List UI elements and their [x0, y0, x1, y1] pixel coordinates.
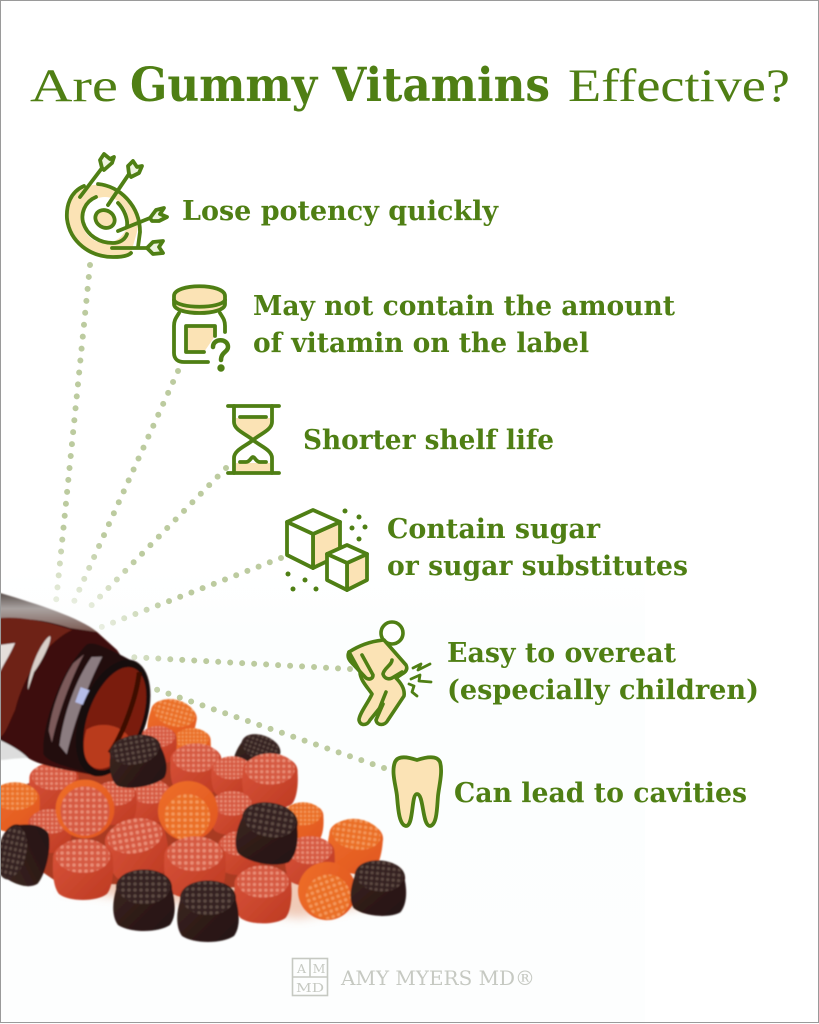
gummy in bottle mouth — [105, 730, 170, 792]
icon: target with arrows — [67, 154, 167, 257]
item 3: shelf life — [228, 406, 554, 473]
logo mark: M — [313, 961, 326, 976]
icon: person with stomach ache — [348, 622, 431, 724]
label: of vitamin on the label — [253, 328, 589, 359]
label: or sugar substitutes — [387, 551, 688, 582]
title: Gummy Vitamins — [130, 58, 550, 113]
label: May not contain the amount — [253, 291, 676, 322]
logo — [292, 958, 535, 996]
icon: tooth — [393, 757, 441, 826]
ground shadow — [60, 860, 400, 918]
icon: jar with question mark — [174, 286, 228, 370]
title: Effective? — [568, 60, 790, 112]
label: Shorter shelf life — [303, 425, 554, 456]
item 4: sugar — [286, 508, 688, 592]
item 5: overeat — [348, 622, 759, 724]
label: (especially children) — [447, 675, 759, 706]
item 6: cavities — [393, 757, 747, 826]
item 1: lose potency — [67, 154, 499, 257]
label: Easy to overeat — [447, 638, 677, 669]
bottle — [0, 593, 170, 792]
logo mark — [292, 958, 328, 996]
label: Can lead to cavities — [454, 778, 747, 809]
logo mark: A — [296, 961, 307, 976]
item 2: may not contain — [174, 286, 676, 370]
title: Are — [30, 60, 118, 112]
front gummies — [0, 819, 409, 942]
photo: spilled gummies and bottle — [0, 593, 409, 942]
icon: hourglass — [228, 406, 279, 473]
logo wordmark: AMY MYERS MD® — [340, 966, 535, 990]
back gummies — [0, 694, 386, 899]
icon: sugar cubes — [286, 508, 368, 592]
logo mark: MD — [296, 980, 324, 995]
dotted connector lines — [56, 265, 384, 768]
label: Lose potency quickly — [182, 196, 499, 227]
pile base — [10, 740, 310, 888]
label: Contain sugar — [387, 514, 601, 545]
